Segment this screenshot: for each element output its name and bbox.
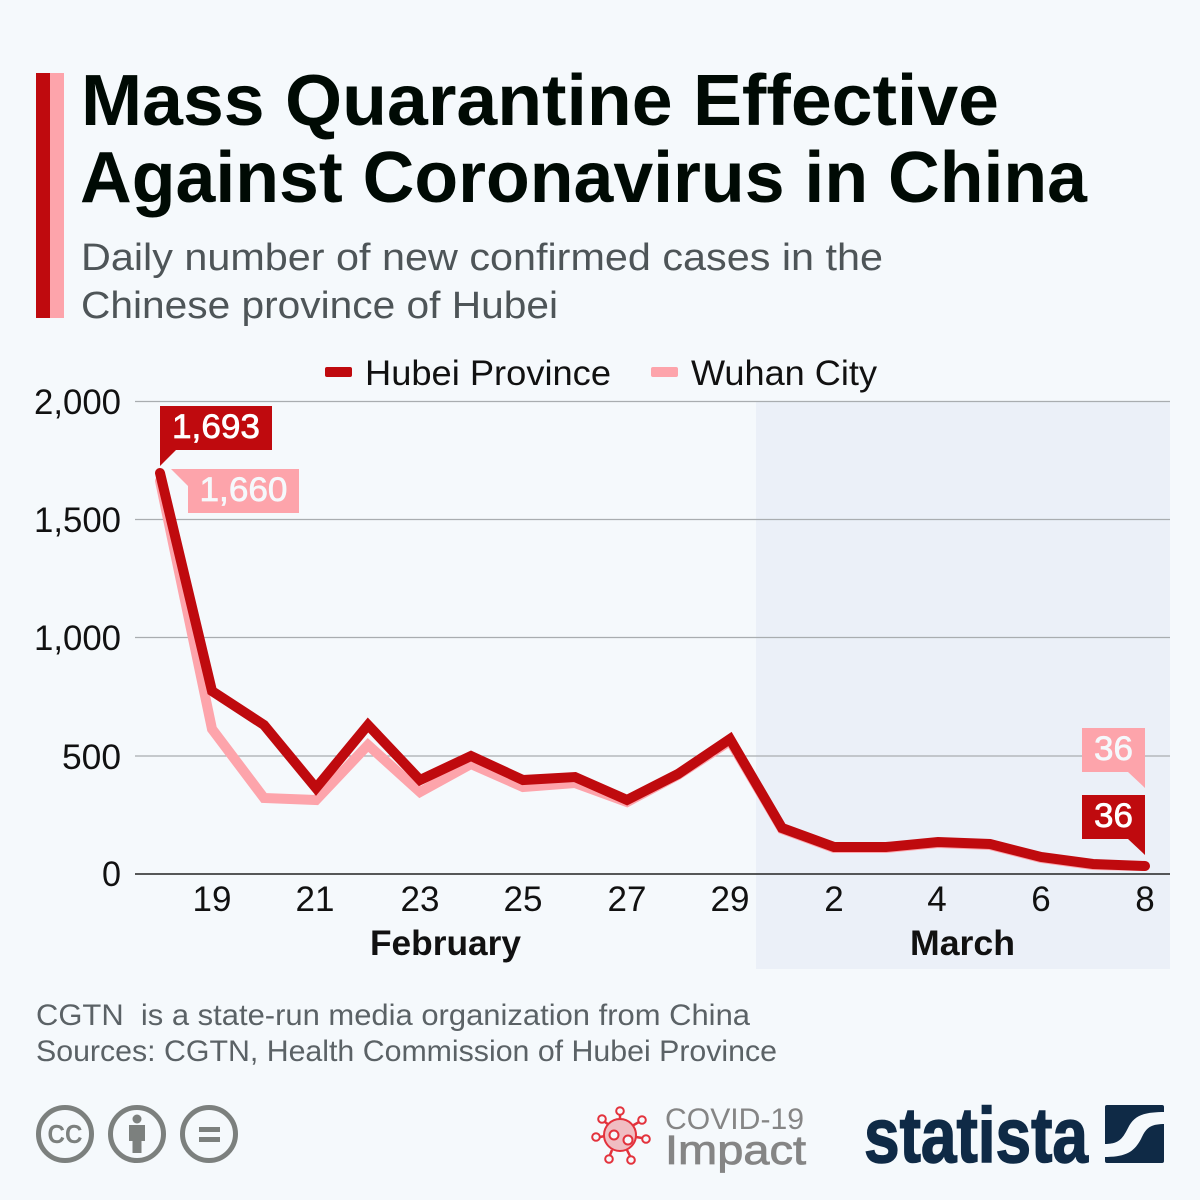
legend: Wuhan City	[691, 354, 878, 393]
callout: Hubei 36	[1082, 795, 1145, 855]
statista wordmark: statista	[864, 1091, 1088, 1179]
y axis labels: 0	[102, 855, 121, 894]
x axis day labels: 25	[504, 880, 542, 919]
x axis day labels: 6	[1031, 880, 1051, 919]
covid-19 impact label: COVID-19	[665, 1103, 804, 1136]
callout: Wuhan 36	[1082, 728, 1145, 788]
line: Wuhan City	[160, 481, 1145, 866]
y axis labels: 2,000	[34, 383, 121, 422]
title: Mass Quarantine Effective	[81, 61, 999, 141]
callout: Hubei 36: 36	[1094, 797, 1133, 835]
callout: Hubei 1,693: 1,693	[172, 408, 260, 446]
y axis labels: 500	[62, 738, 121, 777]
source note: CGTN is a state-run media organization from China	[36, 999, 750, 1032]
icon: creative commons: CC	[48, 1119, 83, 1149]
x axis day labels: 27	[608, 880, 646, 919]
y axis labels: 1,000	[34, 619, 121, 658]
callout: Hubei 1,693	[160, 406, 272, 466]
subtitle: Chinese province of Hubei	[81, 285, 558, 327]
callout: Wuhan 1,660: 1,660	[200, 471, 288, 509]
title: Against Coronavirus in China	[80, 138, 1088, 218]
month labels: February	[370, 924, 522, 963]
covid-19 impact label	[665, 1103, 807, 1173]
y axis labels	[34, 383, 121, 894]
x axis day labels: 4	[927, 880, 947, 919]
x axis day labels: 29	[711, 880, 749, 919]
x axis day labels: 8	[1135, 880, 1155, 919]
x axis day labels: 2	[824, 880, 844, 919]
statista logo mark	[1104, 1105, 1165, 1163]
x axis day labels: 21	[296, 880, 334, 919]
subtitle	[81, 237, 883, 327]
March shaded band	[756, 402, 1170, 969]
month labels	[370, 924, 1015, 963]
grid lines	[135, 402, 1170, 756]
month labels: March	[910, 924, 1015, 963]
title accent bar	[36, 73, 64, 318]
subtitle: Daily number of new confirmed cases in the	[81, 237, 883, 279]
covid-19 impact label: Impact	[665, 1127, 807, 1173]
source note: Sources: CGTN, Health Commission of Hubei Province	[36, 1035, 777, 1068]
source note	[36, 999, 777, 1068]
icon: no derivatives	[182, 1108, 236, 1160]
x axis day labels: 19	[193, 880, 231, 919]
x axis day labels: 23	[401, 880, 439, 919]
title	[80, 61, 1088, 218]
icon: virus	[592, 1107, 650, 1164]
x axis line	[135, 873, 1170, 875]
icon: attribution	[110, 1108, 164, 1160]
line: Hubei Province	[160, 473, 1145, 866]
callout: Wuhan 36: 36	[1094, 730, 1133, 768]
icon: creative commons	[38, 1108, 92, 1160]
callout: Wuhan 1,660	[171, 469, 299, 513]
legend	[325, 354, 878, 393]
x axis day labels	[193, 880, 1155, 919]
y axis labels: 1,500	[34, 501, 121, 540]
legend: Hubei Province	[365, 354, 611, 393]
